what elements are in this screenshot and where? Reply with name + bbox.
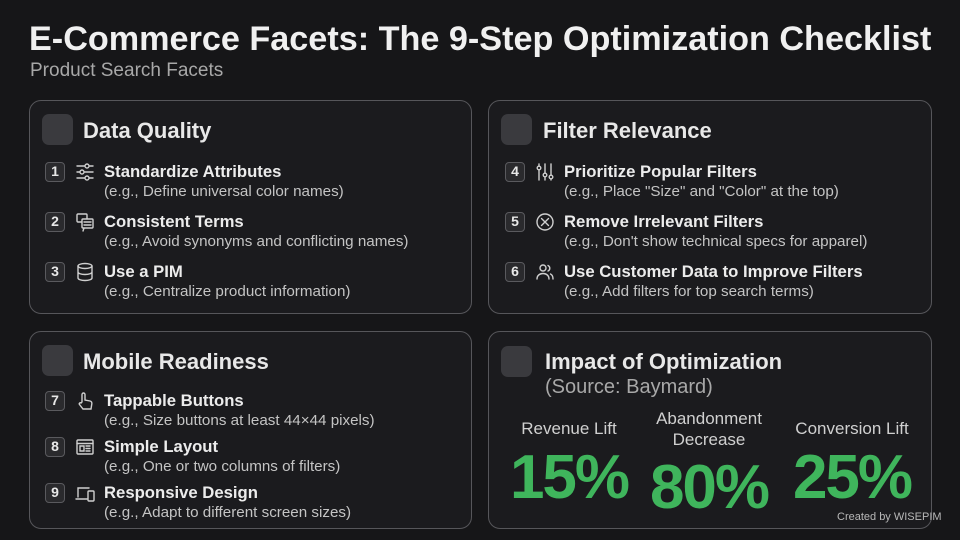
- item 9: (e.g., Adapt to different screen sizes): [104, 504, 351, 521]
- item 7: Tappable Buttons: [104, 391, 244, 410]
- item 3: (e.g., Centralize product information): [104, 283, 350, 300]
- icon: placeholder square: [42, 345, 73, 376]
- stat: abandonment decrease: Abandonment: [656, 409, 762, 428]
- item 6: [505, 262, 863, 300]
- subtitle: Product Search Facets: [30, 60, 223, 81]
- item 3: Use a PIM: [104, 262, 183, 281]
- item 7: [45, 391, 375, 429]
- item 2: Consistent Terms: [104, 212, 244, 231]
- item 2: [45, 212, 408, 250]
- title: E-Commerce Facets: The 9-Step Optimization Checklist: [29, 20, 931, 58]
- icon: placeholder square: [501, 346, 532, 377]
- item 8: 8: [51, 438, 59, 454]
- item 1: (e.g., Define universal color names): [104, 183, 344, 200]
- icon: placeholder square: [501, 114, 532, 145]
- item 9: Responsive Design: [104, 483, 258, 502]
- panel: filter relevance: [488, 100, 932, 314]
- item 1: Standardize Attributes: [104, 162, 281, 181]
- item 7: 7: [51, 392, 59, 408]
- heading: filter relevance: Filter Relevance: [543, 118, 712, 143]
- item 4: [505, 162, 839, 200]
- item 3: 3: [51, 263, 59, 279]
- panel: impact of optimization: [488, 331, 932, 529]
- item 5: (e.g., Don't show technical specs for apparel): [564, 233, 867, 250]
- heading: impact: Impact of Optimization: [545, 349, 782, 374]
- item 5: Remove Irrelevant Filters: [564, 212, 763, 231]
- item 8: (e.g., One or two columns of filters): [104, 458, 340, 475]
- item 6: Use Customer Data to Improve Filters: [564, 262, 863, 281]
- item 9: 9: [51, 484, 59, 500]
- item 4: Prioritize Popular Filters: [564, 162, 757, 181]
- item 8: Simple Layout: [104, 437, 218, 456]
- source note: (Source: Baymard): [545, 376, 713, 398]
- stat: revenue lift: 15%: [510, 443, 628, 512]
- item 5: 5: [511, 213, 519, 229]
- stat: conversion lift: Conversion Lift: [795, 419, 909, 438]
- item 1: [45, 162, 344, 200]
- stat: revenue lift: Revenue Lift: [521, 419, 617, 438]
- panel: data quality: [29, 100, 472, 314]
- panel: mobile readiness: [29, 331, 472, 529]
- item 9: [45, 483, 351, 521]
- item 4: (e.g., Place "Size" and "Color" at the top): [564, 183, 839, 200]
- heading: mobile readiness: Mobile Readiness: [83, 349, 269, 374]
- item 7: (e.g., Size buttons at least 44×44 pixels): [104, 412, 375, 429]
- item 2: 2: [51, 213, 59, 229]
- icon: placeholder square: [42, 114, 73, 145]
- stat: conversion lift: 25%: [793, 443, 911, 512]
- item 6: 6: [511, 263, 519, 279]
- stat: abandonment decrease: Decrease: [673, 430, 745, 449]
- stat: abandonment decrease: [650, 409, 768, 522]
- heading: data quality: Data Quality: [83, 118, 211, 143]
- credit: Created by WISEPIM: [837, 511, 942, 523]
- item 4: 4: [511, 163, 519, 179]
- item 1: 1: [51, 163, 59, 179]
- item 2: (e.g., Avoid synonyms and conflicting names): [104, 233, 408, 250]
- item 6: (e.g., Add filters for top search terms): [564, 283, 814, 300]
- stat: abandonment decrease: 80%: [650, 453, 768, 522]
- item 8: [45, 437, 340, 475]
- item 5: [505, 212, 867, 250]
- item 3: [45, 262, 350, 300]
